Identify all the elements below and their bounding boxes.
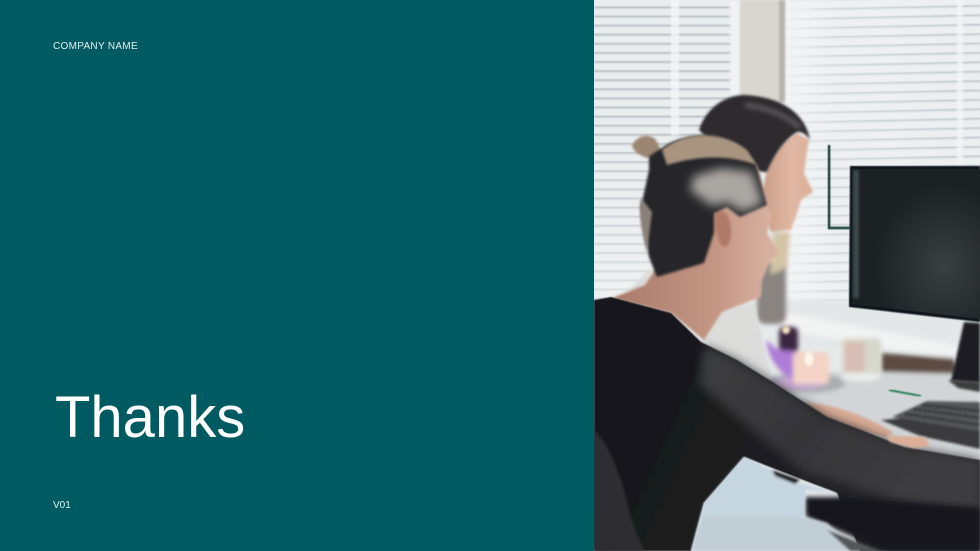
heading: Thanks: Thanks	[55, 385, 245, 450]
woman: head	[699, 95, 813, 275]
man: ear	[715, 211, 731, 247]
monitor	[849, 166, 980, 392]
woman: white shirt	[627, 268, 772, 380]
window blinds background	[594, 0, 980, 551]
chair	[594, 430, 644, 551]
photo: two people at a computer	[594, 0, 980, 551]
pen	[889, 390, 921, 396]
window sill and desk	[782, 300, 980, 460]
woman: hand	[806, 402, 894, 437]
mug	[841, 338, 881, 381]
man: hand	[887, 436, 930, 448]
man: hair	[632, 135, 767, 277]
candles on tray	[765, 327, 845, 393]
man: neck and face	[612, 165, 779, 340]
cable	[829, 145, 850, 228]
keyboard	[881, 401, 980, 449]
woman: pants	[805, 497, 980, 551]
man: dark sweater	[594, 297, 980, 551]
version label: V01	[53, 500, 71, 510]
company name: COMPANY NAME	[53, 40, 138, 52]
woman: light jeans	[691, 457, 880, 551]
panel: teal title panel	[0, 0, 594, 551]
vase	[757, 262, 786, 324]
candle flames	[782, 326, 814, 366]
